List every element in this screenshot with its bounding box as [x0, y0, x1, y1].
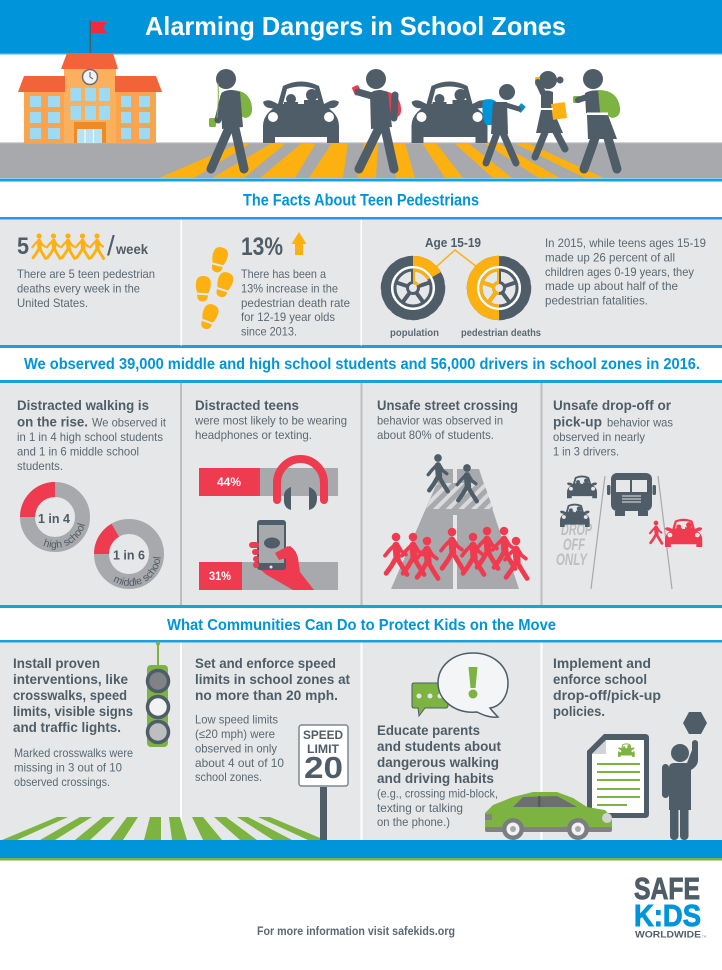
column: proven interventions: and traffic lights. — [13, 719, 121, 735]
column: proven interventions: missing in 3 out of 10 — [14, 760, 122, 774]
column: educate parents: and students about — [377, 738, 501, 754]
column: drop-off policies: enforce school — [553, 671, 647, 687]
icon: speed limit sign: SPEED — [303, 730, 343, 742]
icon: green car — [485, 792, 612, 840]
icon: policy document — [587, 734, 649, 818]
column: distracted teens — [194, 397, 347, 590]
title: Alarming Dangers in School Zones — [145, 11, 566, 41]
heading: what communities can do: What Communities Can Do to Protect Kids on the Move — [167, 617, 556, 634]
panel: observations — [0, 380, 722, 608]
text: 2015 statistic: children ages 0-19 years, they — [545, 265, 694, 279]
column: speed limits: observed in only — [195, 742, 277, 756]
column: unsafe drop-off: pick-up — [553, 414, 602, 430]
column: proven interventions: limits, visible signs — [13, 703, 133, 719]
illustration: road and crosswalk — [0, 142, 722, 182]
bar: texting 31%: 31% — [209, 569, 231, 583]
text: 2015 statistic: made up about half of the — [545, 279, 678, 293]
text: drop off only road marking — [556, 520, 592, 569]
column: educate parents — [377, 653, 508, 829]
header banner — [0, 0, 722, 54]
column: distracted walking: students. — [17, 459, 63, 473]
chart: tire share comparison: population — [390, 328, 439, 339]
illustration: students walking — [209, 69, 620, 169]
fact: 13 percent increase: 13% increase in the — [241, 282, 338, 296]
column: educate parents: (e.g., crossing mid-block, — [377, 786, 498, 800]
icon: headphones — [277, 459, 324, 510]
chart: tire share comparison — [382, 235, 541, 339]
icon: speed limit sign: 20 — [304, 750, 343, 785]
column: educate parents: and driving habits — [377, 770, 494, 786]
column: proven interventions: interventions, like — [13, 671, 128, 687]
chart: tire share comparison: pedestrian deaths — [461, 328, 541, 339]
fact: 13 percent increase — [195, 232, 350, 338]
column: educate parents: on the phone.) — [377, 815, 450, 829]
column: educate parents: Educate parents — [377, 722, 480, 738]
column: distracted teens: Distracted teens — [195, 397, 299, 413]
column: speed limits: school zones. — [195, 770, 262, 784]
column: speed limits: (≤20 mph) were — [195, 727, 275, 741]
fact: 13 percent increase: for 12-19 year olds — [241, 310, 335, 324]
icon: speed limit sign — [299, 725, 348, 840]
column: unsafe street crossing: behavior was observed in — [377, 414, 503, 428]
fact: five deaths per week — [17, 230, 155, 310]
logo: Safe Kids Worldwide: WORLDWIDE — [635, 930, 701, 940]
column: distracted walking: in 1 in 4 high school students — [17, 430, 163, 444]
text: drop off only road marking: DROP — [561, 520, 592, 539]
column: distracted walking: and 1 in 6 middle school — [17, 444, 139, 458]
fact: 13 percent increase: 13% — [241, 233, 283, 261]
column: unsafe drop-off: 1 in 3 drivers. — [553, 444, 619, 458]
icon: pedestrian deaths tire — [468, 258, 530, 318]
column: distracted walking — [17, 397, 167, 589]
column: distracted walking: Distracted walking is — [17, 397, 149, 413]
column: distracted walking: We observed it — [92, 416, 167, 430]
icon: footprints — [195, 246, 235, 331]
column: speed limits: limits in school zones at — [195, 671, 350, 687]
column: proven interventions: crosswalks, speed — [13, 687, 127, 703]
fact: five deaths per week: deaths every week in the — [17, 282, 140, 296]
icon: speed limit sign: LIMIT — [307, 744, 339, 756]
text: 2015 statistic — [545, 236, 706, 308]
icon: population tire — [382, 258, 444, 318]
column: educate parents: texting or talking — [377, 801, 463, 815]
column: proven interventions: Marked crosswalks were — [14, 746, 133, 760]
text: 2015 statistic: made up 26 percent of all — [545, 250, 675, 264]
fact: five deaths per week: week — [115, 241, 148, 257]
text: 2015 statistic: pedestrian fatalities. — [545, 294, 648, 308]
column: unsafe street crossing: Unsafe street crossing — [377, 397, 518, 413]
column: drop-off policies: Implement and — [553, 655, 651, 671]
chart: donut high school — [20, 482, 90, 552]
chart: donut middle school — [94, 519, 164, 589]
fact: five deaths per week: United States. — [17, 296, 88, 310]
column: drop-off policies — [553, 655, 707, 840]
chart: tire share comparison: Age 15-19 — [425, 235, 481, 250]
chart: donut high school: 1 in 4 — [38, 512, 70, 526]
text: drop off only road marking: ONLY — [556, 550, 588, 569]
illustration: school building — [18, 20, 162, 143]
bar: texting 31% — [199, 562, 338, 590]
chart: donut middle school: middle school — [114, 556, 161, 586]
footer text: For more information visit safekids.org — [257, 926, 455, 938]
icon: students using the crosswalk — [428, 454, 477, 501]
fact: 13 percent increase: since 2013. — [241, 324, 297, 338]
footer band — [0, 840, 722, 860]
column: speed limits: Low speed limits — [195, 712, 278, 726]
logo: Safe Kids Worldwide: K:DS — [634, 898, 701, 933]
column: drop-off policies: policies. — [553, 703, 605, 719]
icon: up arrow — [292, 232, 306, 255]
column: educate parents: dangerous walking — [377, 754, 499, 770]
heading: the facts: The Facts About Teen Pedestrians — [243, 190, 479, 210]
text: drop off only road marking: OFF — [563, 535, 585, 554]
illustration: road with crosswalk — [391, 469, 519, 589]
column: unsafe street crossing: about 80% of students. — [377, 428, 494, 442]
column: proven interventions: Install proven — [13, 655, 100, 671]
column: drop-off policies: drop-off/pick-up — [553, 687, 661, 703]
fact: five deaths per week: / — [107, 230, 115, 261]
icon: traffic light — [147, 642, 168, 747]
fact: 13 percent increase: pedestrian death rate — [241, 296, 350, 310]
column: unsafe drop-off: Unsafe drop-off or — [553, 397, 672, 413]
panel: community actions — [0, 640, 722, 860]
column: speed limits: no more than 20 mph. — [195, 687, 338, 703]
column: unsafe drop-off — [553, 397, 702, 589]
icon: students crossing unsafely — [385, 527, 527, 578]
column: speed limits: about 4 out of 10 — [195, 756, 284, 770]
icon: crossing guard with stop sign — [662, 712, 707, 840]
icon: speech bubbles — [412, 653, 508, 717]
illustration: cars in the school zone — [263, 82, 488, 143]
column: distracted walking: on the rise. — [17, 414, 88, 430]
panel: facts — [0, 217, 722, 348]
icon: waiting cars — [560, 476, 597, 527]
column: distracted teens: were most likely to be wearing — [194, 414, 347, 428]
bar: headphones 44%: 44% — [217, 475, 241, 489]
column: speed limits: Set and enforce speed — [195, 655, 336, 671]
column: unsafe drop-off: observed in nearly — [553, 430, 645, 444]
column: unsafe drop-off: behavior was — [607, 416, 673, 430]
column: proven interventions: observed crossings. — [14, 775, 110, 789]
illustration: drop-off lane lines — [591, 476, 672, 589]
text: 2015 statistic: In 2015, while teens ages 15-19 — [545, 236, 706, 250]
fact: five deaths per week: There are 5 teen pedestrian — [17, 267, 155, 281]
column: distracted teens: headphones or texting. — [195, 428, 312, 442]
icon: school bus — [607, 473, 656, 516]
column: unsafe street crossing — [377, 397, 527, 589]
icon: red car and child — [650, 519, 702, 547]
fact: five deaths per week: 5 — [17, 233, 29, 260]
icon: hand holding phone — [249, 520, 314, 590]
column: speed limits — [195, 655, 350, 840]
icon: five walking teens — [32, 233, 104, 258]
chart: donut middle school: 1 in 6 — [113, 548, 145, 562]
illustration: green crosswalk — [2, 817, 325, 840]
bar: headphones 44% — [199, 468, 338, 496]
chart: donut high school: high school — [44, 523, 85, 550]
fact: 13 percent increase: There has been a — [241, 267, 326, 281]
logo: Safe Kids Worldwide — [634, 871, 707, 940]
logo: Safe Kids Worldwide: TM — [702, 934, 707, 938]
logo: Safe Kids Worldwide: SAFE — [634, 871, 700, 906]
column: proven interventions — [13, 642, 168, 789]
